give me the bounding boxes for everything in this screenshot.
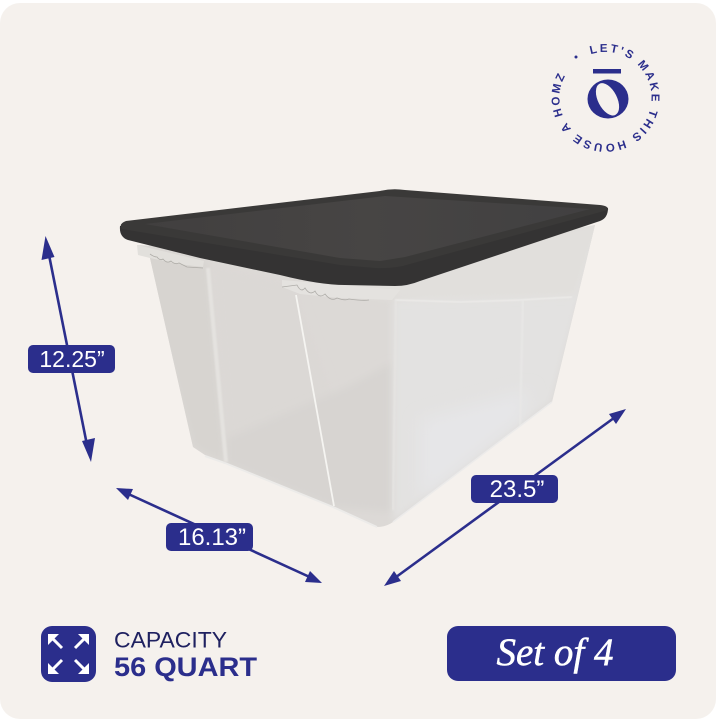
set of 4 badge — [447, 626, 676, 681]
rear wall — [212, 265, 335, 438]
dimension: width — [116, 488, 322, 583]
capacity block — [41, 626, 258, 682]
logo bar — [593, 69, 621, 74]
label: 16.13” — [178, 524, 246, 551]
left panel shade — [150, 258, 166, 330]
arrow — [42, 236, 95, 462]
blue-grey lower right glow — [420, 390, 530, 500]
bin body — [137, 225, 595, 527]
floor — [226, 362, 393, 512]
lid front edge — [120, 208, 608, 286]
bin corner highlight — [296, 295, 334, 506]
arrow — [384, 409, 626, 586]
dimension: height — [28, 236, 115, 462]
capacity value: 56 QUART — [114, 652, 258, 682]
capacity label: CAPACITY — [114, 628, 227, 652]
right panel — [395, 298, 576, 514]
dimension: length — [384, 409, 626, 586]
bin base rim — [205, 456, 377, 527]
logo ring — [588, 79, 628, 119]
left handle — [137, 245, 204, 268]
right handle — [282, 280, 400, 300]
lid recessed panel — [145, 196, 590, 261]
circular tagline: LET'S MAKE THIS HOUSE A HOMZ — [552, 44, 660, 152]
label: 23.5” — [490, 476, 544, 503]
label — [471, 475, 558, 503]
arrow — [116, 488, 322, 583]
icon: expand arrows — [41, 626, 96, 682]
upper front band line — [395, 297, 572, 302]
storage bin — [120, 189, 608, 527]
soft vertical seam near floor — [393, 300, 396, 510]
label: 12.25” — [39, 346, 105, 372]
logo badge — [552, 44, 660, 152]
upper front band — [300, 222, 600, 300]
bin rear corner highlight — [208, 268, 226, 462]
set of 4 badge: Set of 4 — [497, 631, 613, 674]
bin shading — [150, 258, 580, 514]
soft vertical seam — [520, 300, 523, 425]
tagline dot — [574, 56, 578, 58]
bin base right rim — [393, 402, 552, 522]
label — [28, 345, 115, 373]
lid top rim — [121, 189, 608, 268]
